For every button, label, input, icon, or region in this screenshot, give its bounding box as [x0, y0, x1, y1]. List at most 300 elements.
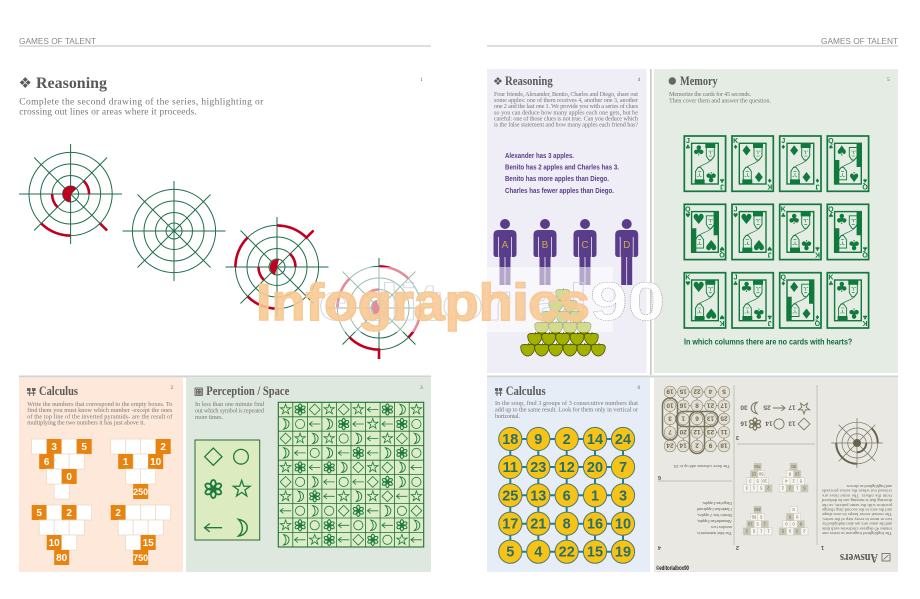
- answer 6: 11: [720, 428, 727, 435]
- card K hearts: ♥: [685, 281, 691, 288]
- card J clubs: ♣: [693, 144, 705, 160]
- heading: calculus: Calculus: [39, 384, 78, 398]
- instructions: add up to the same result. Look for them only in vertical or: [495, 406, 638, 414]
- statements: [505, 153, 619, 195]
- question: In which columns there are no cards with hearts?: [684, 336, 852, 346]
- pyramid 2: 10: [150, 457, 162, 468]
- answer 2: 3: [795, 529, 798, 534]
- pyramid 1: [32, 439, 92, 499]
- pyramid 1: 3: [51, 442, 57, 453]
- answer 4: Diego has 4 apples.: [702, 501, 732, 506]
- answer 2: 1: [795, 486, 798, 491]
- number grid: 18: [502, 432, 518, 448]
- card Q diamonds: Q: [814, 319, 820, 326]
- divider between right page panels: [650, 69, 652, 375]
- number grid: 24: [615, 432, 631, 448]
- pyramid 1: 6: [44, 457, 50, 468]
- answer 2: 15: [751, 471, 756, 476]
- heading: reasoning: Reasoning: [36, 75, 107, 92]
- card K clubs: ♣: [788, 212, 800, 228]
- answer 2: 5: [759, 486, 762, 491]
- card Q diamonds: ♦: [781, 281, 786, 288]
- card Q hearts: ♥: [719, 245, 725, 252]
- card J hearts: [732, 204, 773, 260]
- panel: reasoning apples: [487, 69, 646, 373]
- panel: reasoning series: [18, 74, 430, 359]
- card K diamonds: ♦: [733, 144, 738, 151]
- answer 6: 3: [668, 415, 672, 422]
- answer 2: 2: [736, 544, 739, 550]
- pyramid 2: [111, 439, 171, 499]
- card J clubs: J: [734, 275, 738, 282]
- card Q hearts: ♥: [685, 212, 691, 219]
- person B: [534, 219, 556, 285]
- answer 2: 0: [785, 522, 788, 527]
- card Q clubs: ♣: [848, 236, 860, 252]
- answer 1: rotates 45 degrees clockwise each time: [822, 526, 892, 531]
- answer 2: 1: [759, 529, 762, 534]
- pyramid 3: 10: [49, 538, 60, 549]
- answer 2: 2: [792, 479, 795, 484]
- card J diamonds: ♦: [788, 144, 800, 160]
- statements: Alexander has 3 apples.: [505, 153, 574, 160]
- number grid: 4: [534, 545, 542, 561]
- card Q hearts: Q: [685, 206, 691, 213]
- riddle text: is the false statement and how many apples each friend has?: [494, 122, 638, 128]
- card K diamonds: ♦: [767, 176, 772, 183]
- answer 2: 3: [749, 479, 752, 484]
- answer 6: 15: [679, 388, 687, 395]
- card K diamonds: ♦: [740, 144, 753, 160]
- card K clubs: [827, 273, 869, 328]
- intro text: crossing out lines or areas where it proceeds.: [19, 108, 197, 118]
- answer 2: 10: [762, 479, 767, 484]
- card Q diamonds: ♦: [815, 313, 820, 320]
- card Q diamonds: ♦: [788, 280, 800, 296]
- answer 1: and highlighted as shown.: [846, 484, 892, 489]
- statements: Benito has more apples than Diego.: [505, 176, 609, 183]
- instructions: [195, 401, 265, 421]
- answer 2: 1: [752, 486, 755, 491]
- answer 2: 1: [767, 529, 770, 534]
- heading: memory: Memory: [680, 74, 718, 88]
- target drawing 4: [328, 258, 430, 359]
- answer 6: 13: [707, 415, 714, 422]
- person C: C: [581, 240, 589, 251]
- heading: perception / space: 3: [420, 385, 423, 391]
- intro text: 1: [420, 77, 423, 83]
- number grid: 2: [563, 432, 571, 448]
- answer 2: 5: [756, 479, 759, 484]
- riddle text: Four friends, Alexander, Benito, Charles and Diego, share out: [494, 91, 638, 98]
- pyramid 3: [32, 505, 92, 565]
- answer 2: 50: [751, 514, 756, 519]
- number grid: [499, 427, 635, 563]
- answer 2: 0: [788, 529, 791, 534]
- answer 6: 25: [720, 415, 728, 422]
- answer 2: 10: [794, 471, 799, 476]
- panel: memory: [654, 69, 898, 373]
- card J clubs: ♣: [685, 144, 691, 151]
- watermark: editorial: [318, 274, 588, 332]
- pyramid 3: 2: [66, 508, 72, 519]
- answer 2: 10: [747, 522, 753, 527]
- card J clubs: [684, 136, 726, 191]
- answer 6: 19: [666, 388, 674, 395]
- card J clubs: J: [686, 138, 690, 145]
- card Q hearts: ♥: [693, 212, 705, 228]
- answer 1: and the outer arcs are also multiplied by: [821, 522, 892, 527]
- number grid: 25: [502, 488, 518, 504]
- target drawing 3: [226, 217, 328, 317]
- answer 3: 13: [788, 420, 796, 427]
- instructions: multiplying the two numbers it has just above it.: [27, 420, 145, 427]
- answer 6: 23: [707, 428, 714, 435]
- answer 1: position with the same pattern, so the: [822, 502, 892, 508]
- answer 2: 6: [799, 522, 802, 527]
- card J diamonds: [780, 136, 821, 191]
- card Q spades: Q: [862, 182, 868, 189]
- pyramid 4: 750: [133, 553, 148, 563]
- heading: calculus: [495, 384, 640, 398]
- answer 6: [658, 386, 730, 480]
- heading: reasoning: [493, 74, 640, 88]
- card Q hearts: Q: [719, 251, 725, 258]
- answer 6: 14: [679, 442, 687, 449]
- pyramid 1: 0: [66, 472, 72, 483]
- answer 2: 2: [788, 486, 791, 491]
- answer 6: 24: [666, 442, 674, 449]
- card J hearts: ♥: [767, 245, 772, 252]
- number grid: 6: [563, 488, 571, 504]
- card J hearts: ♥: [753, 236, 765, 252]
- answer 2: 5: [756, 522, 759, 527]
- card J diamonds: ♦: [781, 144, 786, 151]
- heading: perception / space: [195, 384, 423, 398]
- card J diamonds: J: [781, 138, 785, 145]
- number grid: 13: [530, 488, 546, 504]
- heading: reasoning: Reasoning: [505, 74, 553, 88]
- answer 4: Alexander has 3 apples,: [697, 518, 732, 524]
- answer 1: 1: [821, 544, 824, 550]
- answer 2: 750: [753, 464, 761, 469]
- number grid: 12: [559, 460, 575, 476]
- answer 6: 10: [666, 401, 674, 408]
- card J hearts: J: [768, 251, 772, 258]
- card Q clubs: ♣: [836, 212, 848, 228]
- answer 3: [736, 402, 810, 440]
- card J hearts: ♥: [740, 212, 753, 228]
- answer 1: crossed out where the series proceeds: [822, 489, 892, 494]
- card J clubs: ♣: [719, 176, 725, 183]
- person C: [574, 219, 596, 285]
- pyramid 2: 250: [133, 487, 148, 497]
- answer 1: [821, 418, 892, 550]
- card K diamonds: K: [733, 138, 738, 145]
- riddle text: so you can deduce how many apples each one gets, but be: [494, 109, 638, 116]
- rule above lower panels, left page: [19, 376, 431, 378]
- instructions: [495, 400, 638, 420]
- number grid: 22: [559, 545, 575, 561]
- answer 3: 17: [788, 404, 796, 411]
- answer 2: 1: [763, 522, 766, 527]
- heading: memory: [669, 74, 890, 88]
- pyramid 3: 80: [56, 553, 68, 564]
- statements: Charles has fewer apples than Diego.: [505, 188, 614, 195]
- card Q spades: ♠: [848, 168, 860, 184]
- answer 2: 2: [803, 529, 806, 534]
- answer 6: 8: [695, 401, 699, 408]
- person D: D: [623, 240, 630, 251]
- card Q spades: ♠: [862, 176, 868, 183]
- answer 2: 2: [745, 529, 748, 534]
- answer 6: 20: [679, 428, 687, 435]
- answer 3: 25: [763, 404, 771, 411]
- heading: perception / space: Perception / Space: [206, 384, 290, 398]
- pyramid 2: 2: [160, 442, 166, 453]
- person A: [494, 219, 516, 285]
- instructions: more times.: [195, 414, 223, 421]
- person A: A: [502, 240, 509, 251]
- answer 2: 80: [791, 464, 796, 469]
- card Q hearts: ♥: [705, 236, 717, 252]
- riddle text: careful: one of those clues is not true. Can you deduce which: [494, 115, 639, 122]
- card Q diamonds: ♦: [800, 305, 813, 321]
- card K clubs: ♣: [781, 212, 786, 219]
- card K hearts: ♥: [693, 280, 705, 296]
- answer 6: 18: [720, 442, 728, 449]
- heading: reasoning: 4: [638, 77, 640, 83]
- card J hearts: J: [734, 206, 738, 213]
- answer 6: 6: [695, 415, 699, 422]
- watermark: Infographics: [256, 274, 590, 332]
- number grid: 23: [530, 460, 546, 476]
- pyramid 1: 5: [81, 442, 87, 453]
- panel: answers (printed upside down): [654, 378, 898, 572]
- instructions: Memorize the cards for 45 seconds.: [669, 91, 751, 98]
- card K clubs: [780, 204, 821, 260]
- number grid: 14: [587, 432, 603, 448]
- card K clubs: K: [862, 319, 868, 326]
- instructions: [669, 91, 771, 105]
- number grid: 9: [534, 432, 542, 448]
- symbol grid: [278, 402, 424, 547]
- card Q clubs: Q: [828, 206, 834, 213]
- pyramid 4: 2: [115, 508, 121, 519]
- card K hearts: K: [719, 319, 725, 326]
- number grid: 5: [506, 545, 514, 561]
- answer 2: [736, 463, 808, 550]
- heading: calculus: 2: [170, 385, 174, 391]
- answer 6: 4: [708, 388, 712, 395]
- answer 6: 9: [708, 442, 712, 449]
- person D: [615, 219, 638, 285]
- number grid: 17: [502, 517, 518, 533]
- answer 6: 5: [722, 388, 726, 395]
- card K diamonds: ♦: [753, 168, 765, 184]
- answer 6: 6: [658, 474, 661, 480]
- card J clubs: [732, 273, 773, 328]
- answer 2: 5: [752, 529, 755, 534]
- card Q hearts: [684, 204, 726, 260]
- answer 6: 16: [679, 401, 687, 408]
- number grid: 15: [587, 545, 603, 561]
- heading: reasoning: ❖: [493, 75, 503, 88]
- instructions: out which symbol is repeated: [195, 408, 265, 414]
- riddle text: [494, 91, 639, 128]
- instructions: In less than one minute find: [195, 401, 265, 408]
- card Q spades: [827, 136, 869, 191]
- card K hearts: [684, 273, 726, 328]
- card K clubs: ♣: [815, 245, 820, 252]
- answer 3: 30: [740, 404, 748, 411]
- answer 1: from the others. The outer lines are: [822, 493, 892, 498]
- intro text: Complete the second drawing of the series, highlighting or: [19, 96, 264, 108]
- number grid: 16: [587, 517, 603, 533]
- answer 1: and the arcs in the second ring change: [822, 508, 892, 512]
- card J diamonds: ♦: [800, 168, 813, 184]
- watermark veil: [330, 267, 613, 332]
- watermark: 90: [590, 272, 665, 332]
- apple pile: [521, 288, 605, 356]
- symbol legend: [195, 440, 260, 540]
- answer 5: The three columns add up to 20.: [673, 464, 730, 469]
- answer 2: 2: [781, 486, 784, 491]
- answer 2: 50: [758, 471, 763, 476]
- answer 2: 4: [785, 479, 788, 484]
- answer 3: 14: [765, 420, 773, 427]
- card K clubs: K: [828, 275, 833, 282]
- card K clubs: ♣: [828, 281, 834, 288]
- pyramid 4: 15: [143, 538, 154, 549]
- answer 2: 0: [792, 522, 795, 527]
- instructions: [27, 401, 173, 427]
- answer 1: two or more in every step of the series.: [822, 517, 892, 522]
- number grid: 8: [563, 517, 571, 533]
- number grid: 11: [503, 460, 518, 476]
- panel: perception / space: [186, 378, 431, 572]
- instructions: Then cover them and answer the question.: [669, 98, 771, 105]
- answer 4: Charles has 1 apple and: [696, 507, 732, 512]
- answer 2: 0: [792, 507, 795, 512]
- person B: B: [542, 240, 549, 251]
- card J hearts: ♥: [733, 212, 738, 219]
- heading: answers: Answers: [840, 551, 878, 565]
- answer 3: 3: [736, 434, 739, 440]
- card Q spades: ♠: [836, 144, 848, 160]
- number grid: 20: [587, 460, 603, 476]
- rule above lower panels, right page: [487, 376, 898, 378]
- number grid: 19: [615, 545, 631, 561]
- answer 6: 1: [681, 415, 685, 422]
- riddle text: some apples: one of them receives 4, another one 3, another: [494, 97, 638, 104]
- answer 6: 21: [707, 401, 714, 408]
- card J diamonds: ♦: [815, 176, 820, 183]
- heading: memory: 5: [887, 77, 890, 83]
- answer 4: number two.: [710, 525, 732, 530]
- card Q spades: Q: [828, 138, 834, 145]
- instructions: Write the numbers that correspond to the empty boxes. To: [27, 401, 172, 408]
- answer 4: 4: [657, 544, 661, 550]
- number grid: 21: [530, 517, 546, 533]
- card J diamonds: J: [815, 182, 819, 189]
- card K diamonds: [732, 136, 773, 191]
- answer 3: 16: [740, 420, 748, 427]
- pyramid 2: 1: [123, 457, 129, 468]
- credit: ©editorialbox90: [656, 565, 689, 572]
- header right: GAMES OF TALENT: [821, 36, 898, 46]
- card J clubs: ♣: [753, 305, 765, 321]
- answer 6: 12: [693, 428, 701, 435]
- answer 4: Benito has 2 apples,: [697, 512, 732, 518]
- answer 4: The false statement is: [697, 531, 732, 536]
- answer 2: 8: [788, 471, 791, 476]
- answer 2: 5: [799, 479, 802, 484]
- pyramid 4: [111, 505, 171, 565]
- target drawing 1: [19, 144, 122, 244]
- panel: calculus pyramids: [19, 378, 183, 572]
- number grid: 10: [615, 517, 631, 533]
- card Q spades: ♠: [828, 144, 834, 151]
- answer 1: The highlighted fragment in series one: [822, 531, 892, 536]
- card K clubs: K: [815, 251, 820, 258]
- card J clubs: J: [768, 319, 772, 326]
- riddle text: one 2 and the last one 1. We provide you with a series of clues: [494, 103, 639, 110]
- target drawing 2: [122, 181, 226, 281]
- instructions: find them you must know which number -except the ones: [27, 407, 173, 414]
- card Q diamonds: Q: [781, 275, 787, 282]
- panel: calculus number soup: [487, 378, 650, 572]
- answer 6: 2: [695, 442, 699, 449]
- card K clubs: ♣: [800, 236, 813, 252]
- answer 2: 5: [781, 529, 784, 534]
- answer 2: 5: [803, 486, 806, 491]
- heading: calculus: [27, 384, 174, 398]
- card K clubs: K: [781, 206, 786, 213]
- card J clubs: ♣: [740, 280, 753, 296]
- answer 2: 0: [788, 514, 791, 519]
- answer 6: 22: [693, 388, 701, 395]
- card K hearts: ♥: [719, 313, 725, 320]
- card K clubs: ♣: [836, 280, 848, 296]
- answer 4: [657, 501, 732, 550]
- card J clubs: ♣: [767, 313, 772, 320]
- statements: Benito has 2 apples and Charles has 3.: [505, 164, 619, 172]
- number grid: 1: [591, 488, 599, 504]
- answer 2: 2: [767, 486, 770, 491]
- heading: calculus: 6: [638, 385, 640, 391]
- answer 6: 17: [720, 401, 728, 408]
- answer 2: 5: [759, 514, 762, 519]
- card Q clubs: [827, 204, 869, 260]
- answer 2: 250: [753, 507, 761, 512]
- instructions: horizontal.: [495, 413, 520, 420]
- heading: calculus: Calculus: [506, 384, 546, 398]
- heading: answers: [840, 551, 890, 565]
- pyramid 3: 5: [36, 508, 42, 519]
- card K hearts: K: [685, 275, 690, 282]
- answer 6: 7: [668, 428, 672, 435]
- card K clubs: ♣: [862, 313, 868, 320]
- card K clubs: ♣: [848, 305, 860, 321]
- heading: reasoning: ❖: [18, 74, 32, 92]
- card J clubs: ♣: [733, 281, 738, 288]
- card K diamonds: K: [767, 182, 772, 189]
- number grid: 7: [619, 460, 627, 476]
- instructions: In the soup, find 3 groups of 3 consecutive numbers that: [495, 400, 638, 407]
- number grid: 3: [619, 488, 627, 504]
- card K hearts: ♥: [705, 305, 717, 321]
